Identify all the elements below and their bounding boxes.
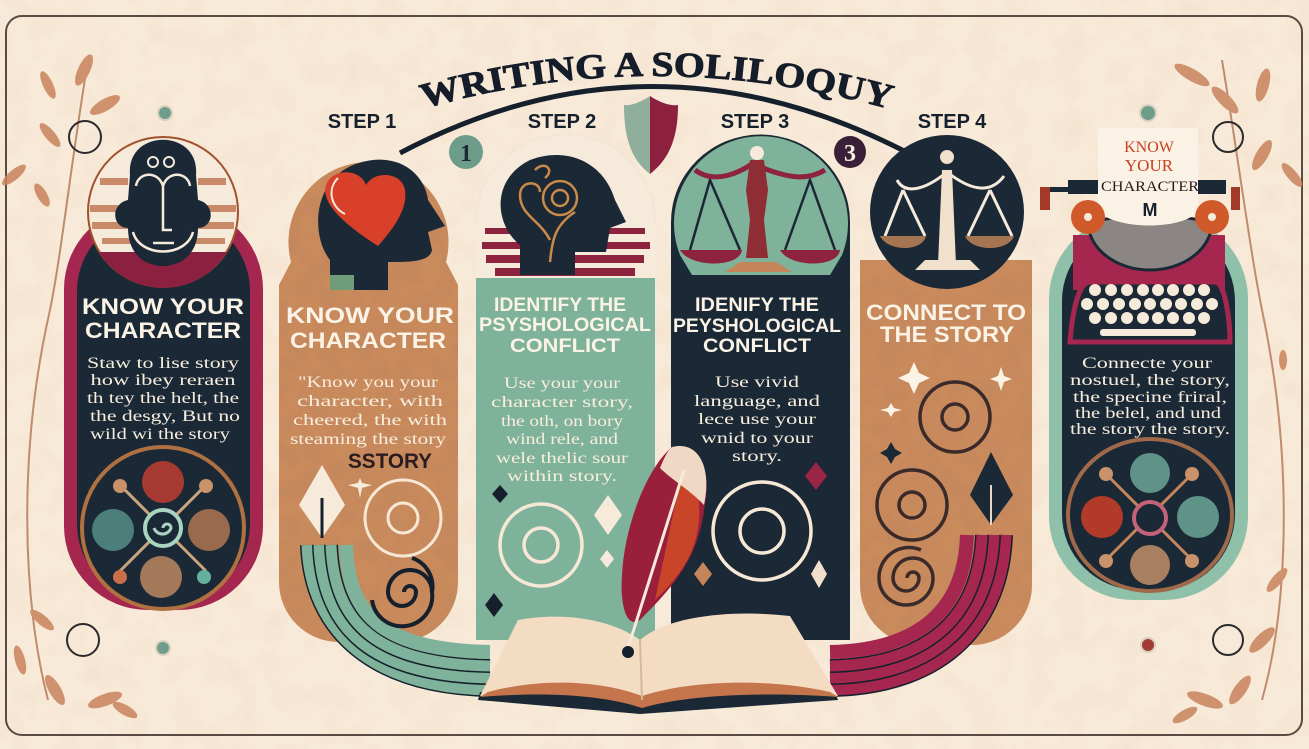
connector arc (400, 86, 908, 153)
icon: diamonds (485, 485, 622, 617)
body text: the belel, and und (1075, 405, 1221, 422)
body text: wind rele, and (506, 431, 618, 448)
panel: know your character (dark) (64, 137, 263, 610)
heading: CONFLICT (510, 336, 620, 357)
icon: spiral, step 4 (879, 547, 933, 605)
heading: IDENTIFY THE (494, 295, 626, 316)
heading (673, 295, 841, 357)
step labels (328, 111, 987, 133)
body text (87, 355, 240, 443)
body text: how ibey reraen (90, 372, 236, 389)
decorative vine: left (0, 52, 140, 721)
body text: character, with (297, 393, 443, 410)
body text (491, 375, 633, 485)
icon: face medallion (88, 137, 238, 288)
heading: CHARACTER (290, 328, 446, 353)
icon: rings (877, 382, 990, 540)
body text: lece use your (698, 411, 817, 428)
icon: open book (478, 614, 838, 714)
body text: th tey the helt, the (87, 390, 239, 407)
icon: head with swirls (476, 135, 655, 278)
body text (694, 374, 820, 465)
step labels: STEP 1 (328, 111, 396, 133)
body text: nostuel, the story, (1070, 372, 1230, 389)
body text: Staw to lise story (87, 355, 239, 372)
decorative vine: right (1170, 60, 1305, 726)
paper with label (1098, 128, 1199, 226)
body text: character story, (491, 394, 633, 411)
icon: concentric rings (500, 504, 582, 586)
heading: KNOW YOUR (286, 303, 454, 328)
icon: spiral, step 1 (372, 558, 433, 626)
body text: wnid to your (701, 430, 814, 447)
step labels: STEP 4 (918, 111, 987, 133)
heading (82, 294, 244, 343)
ornament rings and beads (67, 105, 1243, 656)
body text: steaming the story (290, 431, 446, 448)
step labels: STEP 3 (721, 111, 789, 133)
heading: KNOW YOUR (82, 294, 244, 319)
title: WRITING A SOLILOQUY (418, 52, 896, 108)
icon: dark diamond (970, 452, 1013, 525)
body text: cheered, the with (293, 412, 447, 429)
heading: CONFLICT (703, 336, 811, 357)
diagram: orbs (1068, 439, 1232, 591)
icon: quill feather (622, 446, 706, 658)
heading: PSYSHOLOGICAL (479, 315, 651, 336)
badge: 1 (449, 135, 483, 169)
panel: step 1 know your character (orange) (279, 160, 458, 642)
body text: the specine friral, (1073, 389, 1227, 406)
body text: within story. (507, 468, 617, 485)
body text: the desgy, But no (90, 408, 240, 425)
icon: concentric rings (713, 482, 811, 580)
badge: 3: 3 (844, 141, 856, 167)
badge: 3 (834, 136, 866, 168)
paper with label: M (1142, 200, 1158, 220)
heading (479, 295, 651, 357)
icon: concentric rings (365, 480, 441, 556)
icon: balance scale dark (870, 135, 1024, 289)
panel: step 3 psychological conflict (dark) (671, 135, 850, 640)
heading: CHARACTER (85, 318, 241, 343)
panel: step 2 psychological conflict (green) (476, 135, 655, 640)
icon: sparkles (880, 362, 1012, 464)
body text: the story the story. (1070, 421, 1230, 438)
body text: Connecte your (1082, 355, 1213, 372)
paper with label: KNOW (1124, 139, 1175, 156)
label: story: SSTORY (348, 450, 432, 473)
heading: IDENIFY THE (695, 295, 819, 316)
icon: head with heart (318, 160, 445, 290)
step labels: STEP 2 (528, 111, 596, 133)
heading (286, 303, 454, 353)
panel: step 4 connect to the story (orange) (860, 135, 1032, 645)
ribbon: crimson stripes (830, 535, 1006, 690)
body text: wild wi the story (90, 426, 230, 443)
heading: PEYSHOLOGICAL (673, 316, 841, 337)
body text: "Know you your (298, 374, 439, 391)
heading: THE STORY (880, 322, 1014, 347)
badge: 1: 1 (460, 141, 472, 167)
body text: Use vivid (715, 374, 799, 391)
body text: wele thelic sour (496, 450, 629, 467)
body text: Use your your (504, 375, 621, 392)
icon: shield (624, 96, 678, 174)
heading: CONNECT TO (866, 300, 1026, 325)
body text (1070, 355, 1230, 438)
ribbon: green stripes (307, 545, 490, 690)
icon: diamonds (694, 462, 827, 588)
panel: typewriter (1040, 128, 1248, 600)
icon: diamond (299, 465, 372, 538)
body text: story. (732, 448, 782, 465)
diagram: orbs (82, 447, 244, 609)
icon: balance scale (674, 136, 848, 275)
paper with label: CHARACTER (1101, 179, 1199, 195)
body text: the oth, on bory (501, 413, 623, 430)
body text: language, and (694, 393, 820, 410)
body text (290, 374, 447, 448)
icon: typewriter (1040, 128, 1240, 342)
heading (866, 300, 1026, 347)
paper with label: YOUR (1125, 156, 1174, 175)
